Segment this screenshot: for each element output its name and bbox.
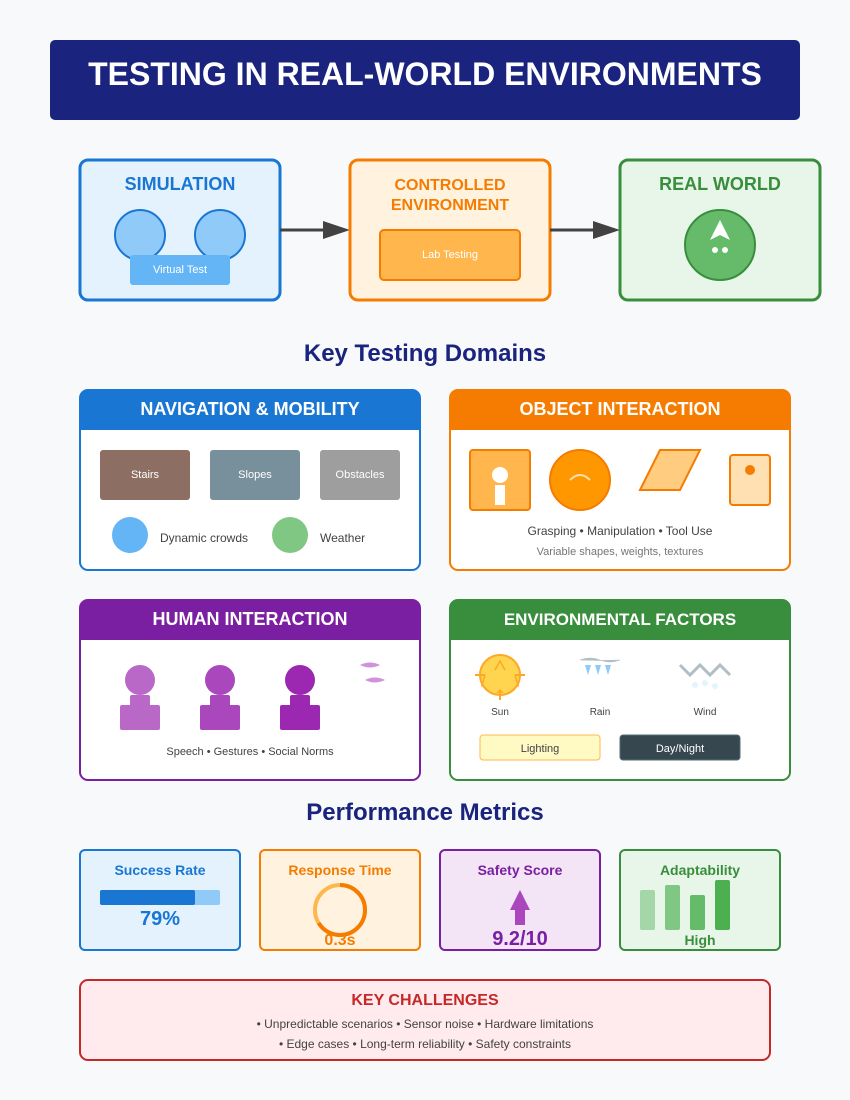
metric: adaptability: [620, 850, 780, 950]
metric: response time: Response Time: [288, 862, 392, 878]
panel: environmental factors: ENVIRONMENTAL FACTORS: [504, 610, 736, 629]
panel: navigation and mobility: NAVIGATION & MOBILITY: [140, 399, 360, 419]
metric: adaptability: Adaptability: [660, 862, 740, 878]
panel: navigation and mobility: Stairs: [131, 469, 160, 481]
panel: navigation and mobility: Obstacles: [336, 469, 385, 481]
panel: key challenges: [80, 980, 770, 1060]
metric: safety score: 9.2/10: [492, 928, 548, 950]
metric: success rate: 79%: [140, 908, 180, 930]
panel: object interaction: [450, 390, 790, 570]
metric: success rate: Success Rate: [114, 862, 206, 878]
panel: human interaction: [80, 600, 420, 780]
metric: response time: [260, 850, 420, 950]
metric: safety score: [440, 850, 600, 950]
arrow: simulation to controlled environment: [280, 221, 350, 239]
panel: controlled environment: ENVIRONMENT: [391, 197, 509, 214]
metric: response time: 0.3s: [324, 932, 356, 949]
panel: object interaction: Variable shapes, weights, textures: [537, 546, 704, 558]
panel: controlled environment: [350, 160, 550, 300]
panel: object interaction: Grasping • Manipulation • Tool Use: [528, 524, 713, 538]
panel: controlled environment: CONTROLLED: [394, 177, 506, 194]
panel: key challenges: KEY CHALLENGES: [351, 992, 499, 1009]
panel: navigation and mobility: Dynamic crowds: [160, 531, 248, 545]
panel: navigation and mobility: Slopes: [238, 469, 272, 481]
panel: human interaction: Speech • Gestures • Social Norms: [166, 746, 334, 758]
panel: environmental factors: Lighting: [521, 743, 559, 755]
arrow: controlled environment to real world: [550, 221, 620, 239]
panel: real world: [620, 160, 820, 300]
metric: success rate: [80, 850, 240, 950]
panel: environmental factors: Day/Night: [656, 743, 704, 755]
panel: environmental factors: Wind: [694, 707, 716, 718]
metric: safety score: Safety Score: [478, 862, 563, 878]
panel: key challenges: • Edge cases • Long-term reliability • Safety constraints: [279, 1037, 571, 1051]
heading: key testing domains: Key Testing Domains: [304, 340, 546, 367]
panel: simulation: SIMULATION: [125, 174, 235, 194]
title banner: [50, 40, 800, 120]
panel: simulation: [80, 160, 280, 300]
panel: navigation and mobility: Weather: [320, 531, 365, 545]
panel: environmental factors: Rain: [590, 707, 610, 718]
panel: controlled environment: Lab Testing: [422, 249, 478, 261]
panel: real world: REAL WORLD: [659, 174, 781, 194]
heading: performance metrics: Performance Metrics: [306, 799, 544, 826]
panel: navigation and mobility: [80, 390, 420, 570]
metric: adaptability: High: [684, 932, 716, 948]
panel: key challenges: • Unpredictable scenarios • Sensor noise • Hardware limitations: [257, 1017, 593, 1031]
panel: human interaction: HUMAN INTERACTION: [152, 609, 348, 629]
panel: environmental factors: Sun: [491, 707, 509, 718]
panel: simulation: Virtual Test: [153, 264, 207, 276]
panel: object interaction: OBJECT INTERACTION: [519, 399, 721, 419]
title banner: TESTING IN REAL-WORLD ENVIRONMENTS: [88, 56, 762, 92]
panel: environmental factors: [450, 600, 790, 780]
